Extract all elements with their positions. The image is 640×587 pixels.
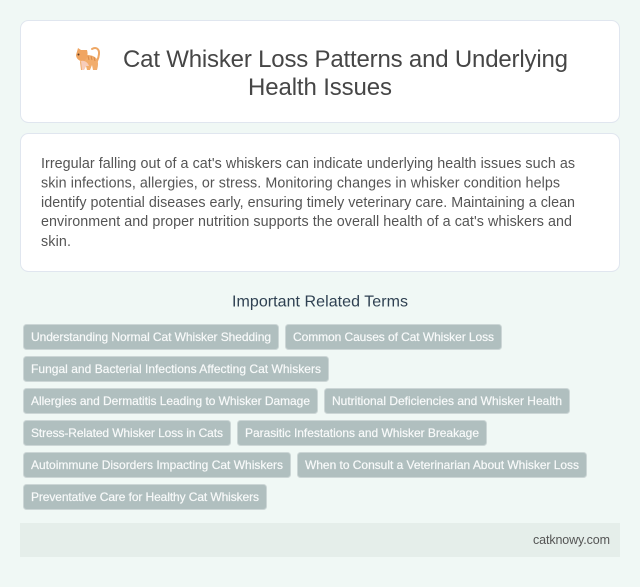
title [123, 46, 568, 101]
panel: description card [20, 134, 620, 272]
description text: environment and proper nutrition supports the overall health of a cat's whiskers and [41, 214, 572, 230]
description text: identify potential diseases early, ensuring timely veterinary care. Maintaining a clean [41, 195, 575, 211]
tag: parasites: Parasitic Infestations and Whisker Breakage [245, 426, 479, 440]
description text: Irregular falling out of a cat's whiskers can indicate underlying health issues such as [41, 156, 575, 172]
footer [20, 523, 620, 557]
tag: allergies [24, 388, 318, 414]
tag: common causes: Common Causes of Cat Whisker Loss [293, 330, 494, 344]
tag: normal shedding: Understanding Normal Cat Whisker Shedding [31, 330, 271, 344]
tag: autoimmune: Autoimmune Disorders Impacting Cat Whiskers [31, 458, 283, 472]
footer: catknowy.com [533, 533, 610, 547]
tag: allergies: Allergies and Dermatitis Leading to Whisker Damage [31, 394, 310, 408]
title: Cat Whisker Loss Patterns and Underlying [123, 46, 568, 73]
tag: preventative care [24, 484, 266, 510]
tag: veterinarian [298, 452, 586, 478]
tag: parasites [238, 420, 486, 446]
heading: related terms: Important Related Terms [232, 294, 408, 310]
tag: nutrition [324, 388, 570, 414]
description text [41, 156, 575, 250]
tag: veterinarian: When to Consult a Veterinarian About Whisker Loss [305, 458, 579, 472]
tag: autoimmune [24, 452, 290, 478]
tag: infections: Fungal and Bacterial Infections Affecting Cat Whiskers [31, 362, 321, 376]
description text: skin. [41, 234, 71, 250]
tag: preventative care: Preventative Care for Healthy Cat Whiskers [31, 490, 259, 504]
panel: header card [20, 20, 620, 122]
tag: common causes [286, 324, 502, 350]
title: Health Issues [248, 74, 392, 101]
tag: nutrition: Nutritional Deficiencies and Whisker Health [332, 394, 562, 408]
tag: infections [24, 356, 328, 382]
tag: stress: Stress-Related Whisker Loss in Cats [31, 426, 223, 440]
icon: cat [76, 48, 99, 70]
description text: skin infections, allergies, or stress. Monitoring changes in whisker condition helps [41, 176, 560, 192]
tag: stress [24, 420, 230, 446]
tag: normal shedding [24, 324, 278, 350]
